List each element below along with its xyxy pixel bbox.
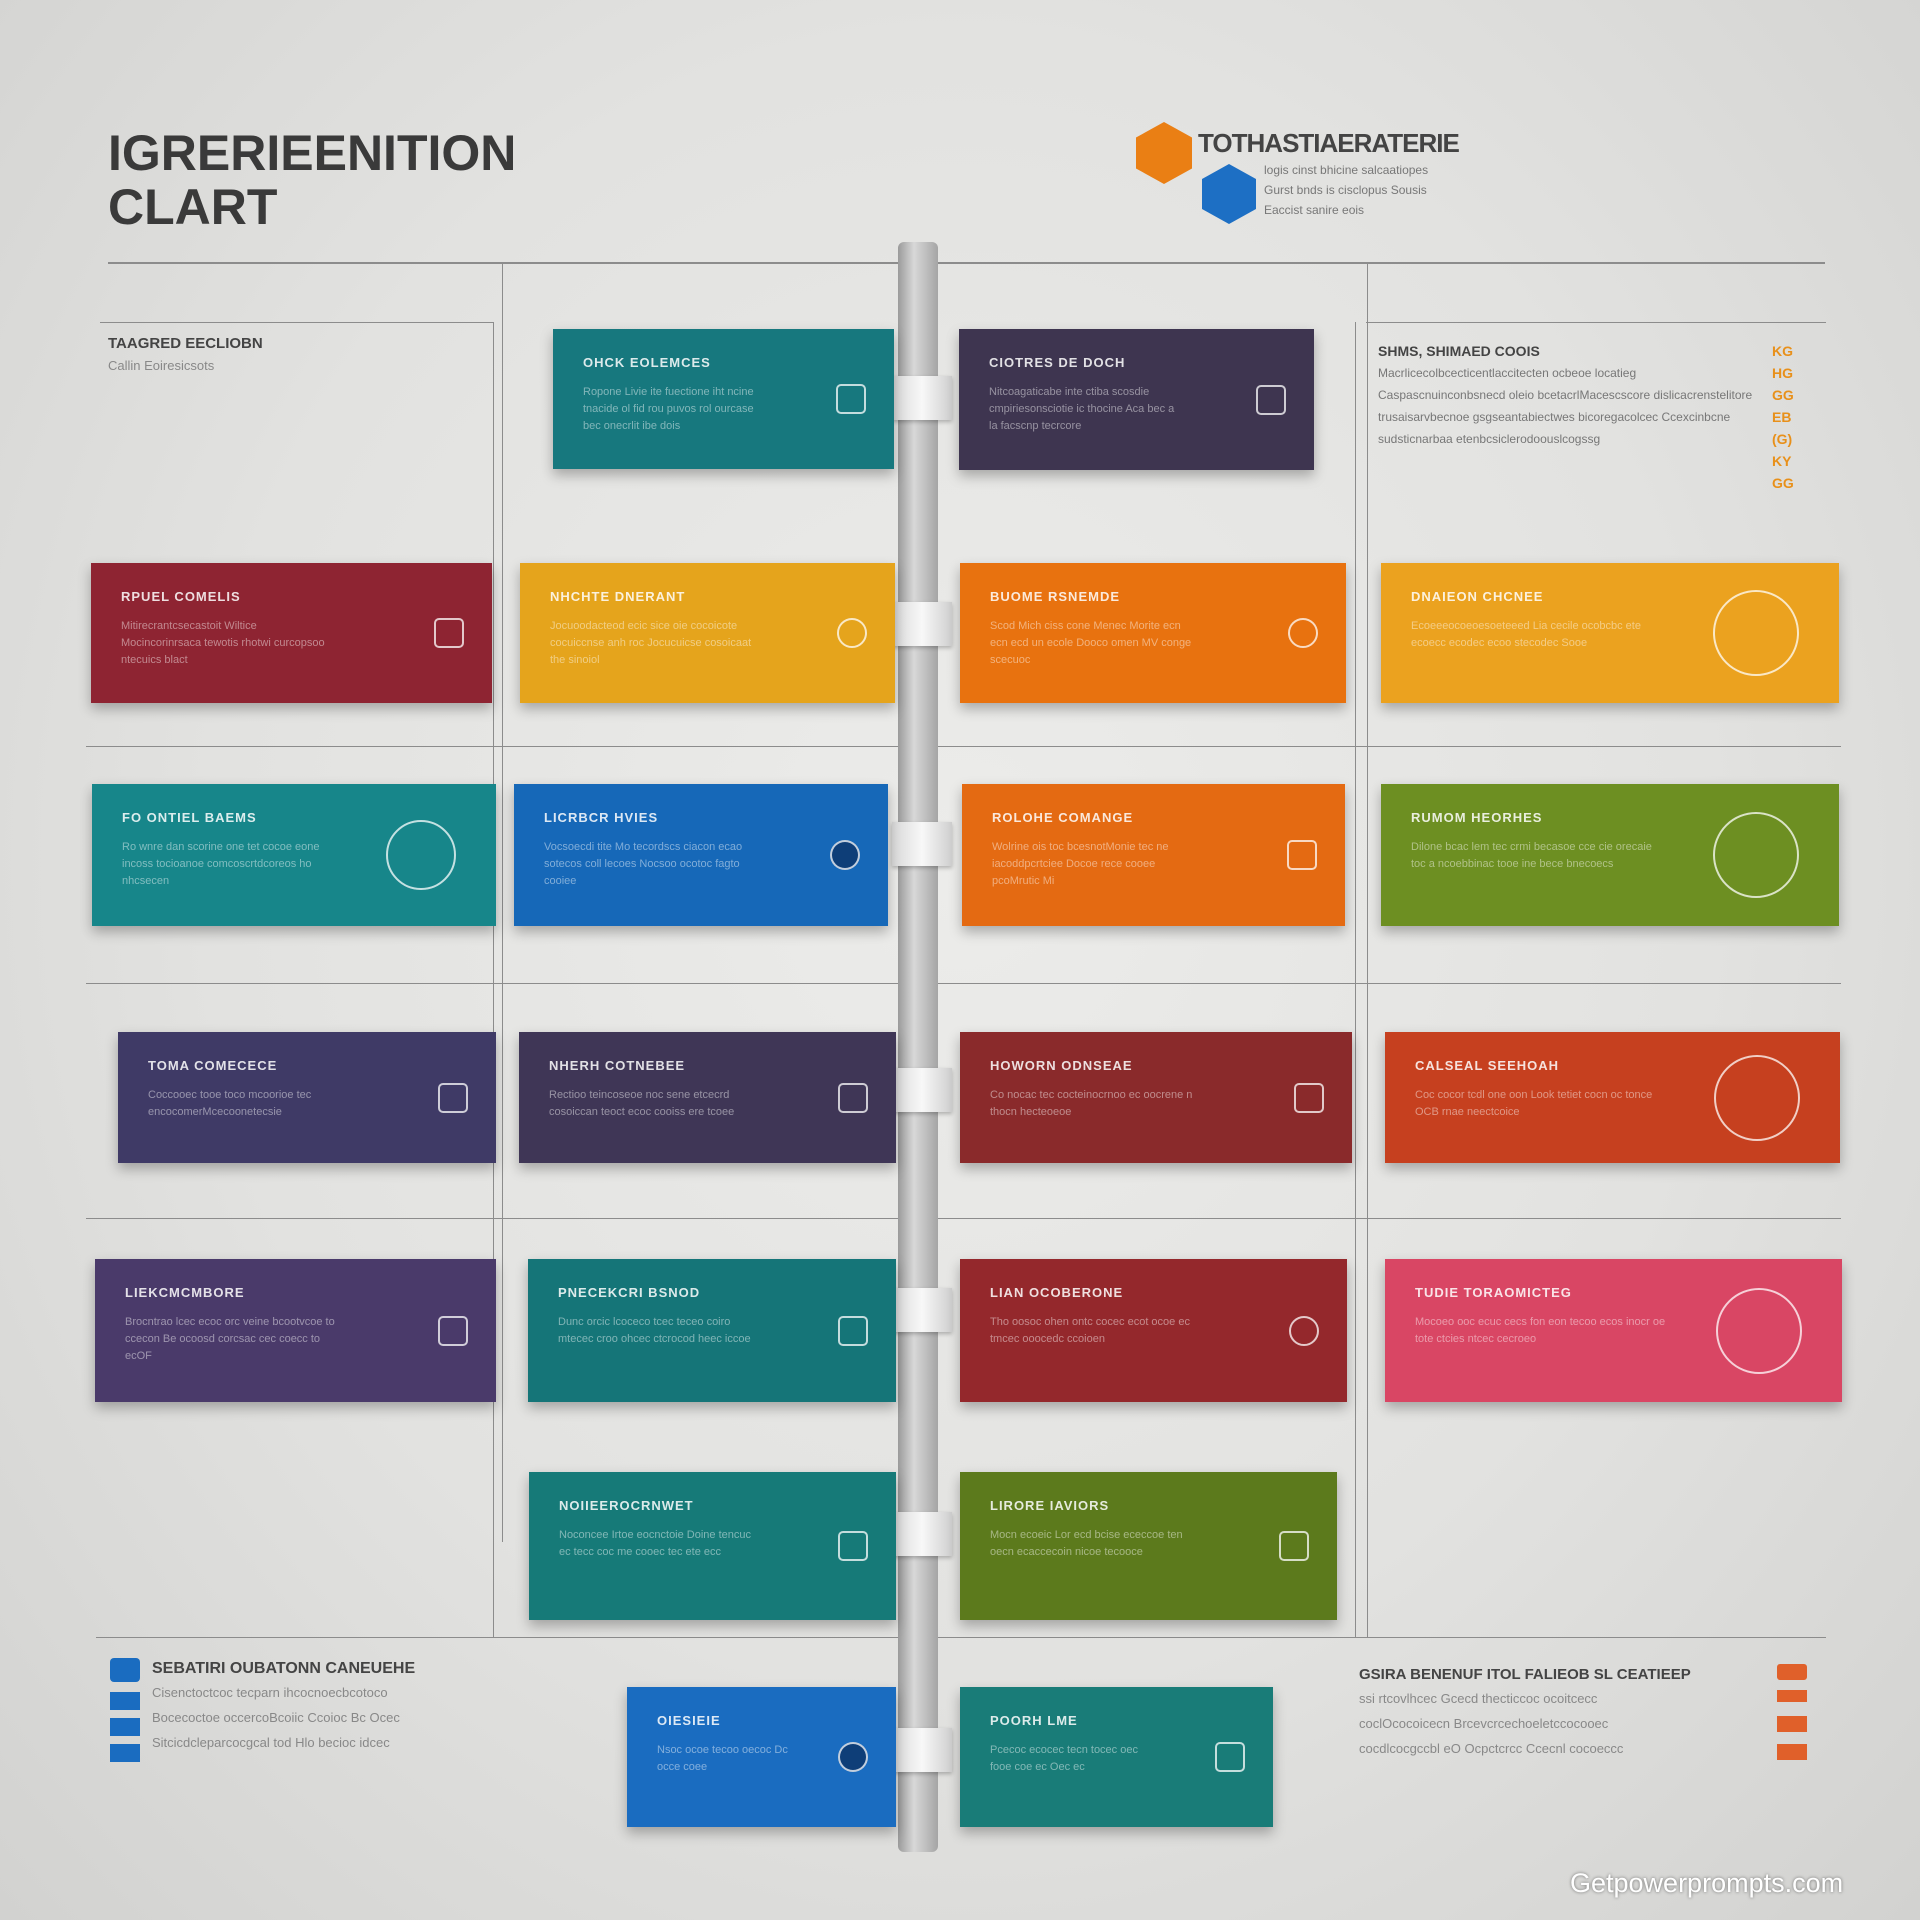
box: yellow-orange r2: DNAIEON CHCNEE: [1411, 589, 1543, 604]
box: teal r3: [92, 784, 496, 926]
right text block: GG: [1772, 387, 1794, 403]
box: purple r5: LIEKCMCMBORE: [125, 1285, 245, 1300]
legend text: Eaccist sanire eois: [1264, 203, 1364, 217]
pole clips: [890, 376, 954, 1776]
title: CLART: [108, 179, 277, 235]
icon: [837, 618, 867, 648]
bottom left legend: Bocecoctoe occercoBcoiic Ccoioc Bc Ocec: [152, 1710, 400, 1725]
icon: [1279, 1531, 1309, 1561]
bottom right legend: coclOcocoicecn Brcevcrcechoeletccocooec: [1359, 1716, 1608, 1731]
bottom left legend: Sitcicdcleparcocgcal tod Hlo becioc idcec: [152, 1735, 390, 1750]
box: blue r3: LICRBCR HVIES: [544, 810, 658, 825]
box: teal r5: PNECEKCRI BSNOD: [558, 1285, 700, 1300]
box: blue r7: Nsoc ocoe tecoo oecoc Dc occe coee: [657, 1744, 788, 1773]
right text block: EB: [1772, 409, 1791, 425]
icon: [838, 1742, 868, 1772]
box: blue r3: [514, 784, 888, 926]
title: IGRERIEENITION: [108, 125, 516, 181]
box: red r2: [91, 563, 492, 703]
box: green r3: Dilone bcac lem tec crmi becasoe cce cie orecaie toc a ncoebbinac tooe ine bece bnecoecs: [1411, 841, 1652, 870]
box: red r5: LIAN OCOBERONE: [990, 1285, 1123, 1300]
watermark: Getpowerprompts.com: [1570, 1868, 1843, 1898]
center pole: [898, 242, 938, 1852]
icon: [1713, 590, 1799, 676]
connector lines: [108, 262, 1825, 264]
box: red r2: RPUEL COMELIS: [121, 589, 241, 604]
box: orange r2: Scod Mich ciss cone Menec Morite ecn ecn ecd un ecole Dooco omen MV conge scecuoc: [990, 620, 1191, 666]
icon: [1713, 812, 1799, 898]
box: teal r7: [960, 1687, 1273, 1827]
box: teal r6: [529, 1472, 896, 1620]
legend text: [1264, 163, 1428, 217]
box: red-orange r4: CALSEAL SEEHOAH: [1415, 1058, 1559, 1073]
icon: [1294, 1082, 1324, 1112]
box: purple r4: Coccooec tooe toco mcoorioe tec encocomerMcecoonetecsie: [148, 1089, 311, 1118]
box: green r3: [1381, 784, 1839, 926]
box: orange r3: Wolrine ois toc bcesnotMonie tec ne iacoddpcrtciee Docoe rece cooee pcoMrutic Mi: [992, 841, 1168, 887]
box: yellow-orange r2: [1381, 563, 1839, 703]
right text block: [1378, 343, 1794, 491]
box: green r3: RUMOM HEORHES: [1411, 810, 1542, 825]
box: red r4: [960, 1032, 1352, 1163]
box: teal r1: Ropone Livie ite fuectione iht ncine tnacide ol fid rou puvos rol ourcase bec onecrlit ibe dois: [583, 386, 754, 432]
box: pink r5: [1385, 1259, 1842, 1402]
box: yellow r2: Jocuoodacteod ecic sice oie cocoicote cocuiccnse anh roc Jocucuicse cosoicaat the sinoiol: [550, 620, 751, 666]
box: blue r7: OIESIEIE: [657, 1713, 721, 1728]
right text block: Macrlicecolbcecticentlaccitecten ocbeoe locatieg Caspascnuinconbsnecd oleio bcetacrlMacescscore dislicacrenstelitore trusaisarvbecnoe gsgseantabiectwes bicoregacolcec Ccexcinbcne sudsticnarbaa etenbcsiclerodoouslcogssg: [1378, 366, 1752, 446]
box: purple r1: [959, 329, 1314, 470]
box: red-orange r4: Coc cocor tcdl one oon Look tetiet cocn oc tonce OCB rnae neectcoice: [1415, 1089, 1652, 1118]
box: orange r3: [962, 784, 1345, 926]
bottom right legend: cocdlcocgccbl eO Ocpctcrcc Ccecnl cocoeccc: [1359, 1741, 1623, 1756]
box: red r5: Tho oosoc ohen ontc cocec ecot ocoe ec tmcec ooocedc ccoioen: [990, 1316, 1190, 1345]
bottom left legend: [110, 1658, 415, 1762]
legend text: Gurst bnds is cisclopus Sousis: [1264, 183, 1427, 197]
box: purple r1: CIOTRES DE DOCH: [989, 355, 1125, 370]
icon: blue hexagon: [1202, 164, 1256, 224]
left text block: Callin Eoiresicsots: [108, 358, 214, 373]
icon: [438, 1316, 468, 1346]
right text block: KY: [1772, 453, 1791, 469]
icon: [438, 1082, 468, 1112]
legend text: logis cinst bhicine salcaatiopes: [1264, 163, 1428, 177]
right text block: SHMS, SHIMAED COOIS: [1378, 343, 1540, 359]
right text block: KG: [1772, 343, 1793, 359]
box: orange r3: ROLOHE COMANGE: [992, 810, 1133, 825]
box: orange r2: BUOME RSNEMDE: [990, 589, 1120, 604]
icon: [1215, 1742, 1245, 1772]
box: teal r7: POORH LME: [990, 1713, 1078, 1728]
box: red r2: Mitirecrantcsecastoit Wiltice Mocincorinrsaca tewotis rhotwi curcopsoo ntecuics blact: [121, 620, 325, 666]
box: teal r5: [528, 1259, 896, 1402]
left text block: [108, 335, 263, 373]
icon: [1287, 840, 1317, 870]
box: red r4: HOWORN ODNSEAE: [990, 1058, 1133, 1073]
bottom left legend: Cisenctoctcoc tecparn ihcocnoecbcotoco: [152, 1685, 388, 1700]
icon: [1716, 1288, 1802, 1374]
box: teal r5: Dunc orcic lcoceco tcec teceo coiro mtecec croo ohcec ctcrocod heec iccoe: [558, 1316, 751, 1345]
box: yellow-orange r2: Ecoeeeocoeoesoeteeed Lia cecile ocobcbc ete ecoecc ecodec ecoo stecodec Sooe: [1411, 620, 1641, 649]
box: green r6: [960, 1472, 1337, 1620]
box: purple r4b: NHERH COTNEBEE: [549, 1058, 685, 1073]
icon: [1714, 1054, 1800, 1140]
box: green r6: Mocn ecoeic Lor ecd bcise ececcoe ten oecn ecaccecoin nicoe tecooce: [990, 1529, 1183, 1558]
box: teal r3: FO ONTIEL BAEMS: [122, 810, 257, 825]
icon: [830, 840, 860, 870]
right text block: GG: [1772, 475, 1794, 491]
box: teal r3: Ro wnre dan scorine one tet cocoe eone incoss tocioanoe comcoscrtdcoreos ho nhcsecen: [122, 841, 320, 887]
bottom right legend: ssi rtcovlhcec Gcecd thecticcoc ocoitcecc: [1359, 1691, 1597, 1706]
icon: [838, 1531, 868, 1561]
icon: [1288, 618, 1318, 648]
top right legend: [1136, 122, 1459, 224]
box: teal r1: [553, 329, 894, 469]
box: purple r5: [95, 1259, 496, 1402]
box: teal r6: Noconcee Irtoe eocnctoie Doine tencuc ec tecc coc me cooec tec ete ecc: [559, 1529, 751, 1558]
icon: [838, 1316, 868, 1346]
box: yellow r2: [520, 563, 895, 703]
icon: [1289, 1316, 1319, 1346]
legend heading: TOTHASTIAERATERIE: [1198, 128, 1459, 158]
icon: [836, 384, 866, 414]
icon: [838, 1082, 868, 1112]
box: red r5: [960, 1259, 1347, 1402]
bottom right legend: GSIRA BENENUF ITOL FALIEOB SL CEATIEEP: [1359, 1666, 1691, 1683]
bottom left legend: SEBATIRI OUBATONN CANEUEHE: [152, 1660, 415, 1677]
icon: [1256, 384, 1286, 414]
icon: orange hexagon: [1136, 122, 1192, 184]
icon: [386, 820, 456, 890]
left text block: TAAGRED EECLIOBN: [108, 335, 263, 352]
box: pink r5: TUDIE TORAOMICTEG: [1415, 1285, 1572, 1300]
box: purple r4b: [519, 1032, 896, 1163]
box: orange r2: [960, 563, 1346, 703]
box: teal r7: Pcecoc ecocec tecn tocec oec fooe coe ec Oec ec: [990, 1744, 1138, 1773]
box: pink r5: Mocoeo ooc ecuc cecs fon eon tecoo ecos inocr oe tote ctcies ntcec cecroeo: [1415, 1316, 1665, 1345]
icon: [434, 618, 464, 648]
box: teal r1: OHCK EOLEMCES: [583, 355, 711, 370]
box: purple r5: Brocntrao lcec ecoc orc veine bcootvcoe to ccecon Be ocoosd corcsac cec coecc to ecOF: [125, 1316, 335, 1362]
box: teal r6: NOIIEEROCRNWET: [559, 1498, 694, 1513]
box: green r6: LIRORE IAVIORS: [990, 1498, 1109, 1513]
box: blue r7: [627, 1687, 896, 1827]
title: [108, 125, 516, 235]
box: red-orange r4: [1385, 1032, 1840, 1163]
box: purple r4: TOMA COMECECE: [148, 1058, 277, 1073]
right text block: (G): [1772, 431, 1792, 447]
box: purple r1: Nitcoagaticabe inte ctiba scosdie cmpiriesonsciotie ic thocine Aca bec a la facscnp tecrcore: [989, 386, 1174, 432]
box: blue r3: Vocsoecdi tite Mo tecordscs ciacon ecao sotecos coll lecoes Nocsoo ocotoc fagto cooiee: [544, 841, 742, 887]
box: purple r4b: Rectioo teincoseoe noc sene etcecrd cosoiccan teoct ecoc cooiss ere tcoee: [549, 1089, 734, 1118]
box: red r4: Co nocac tec cocteinocrnoo ec oocrene n thocn hecteoeoe: [990, 1089, 1192, 1118]
box: purple r4: [118, 1032, 496, 1163]
right text block: HG: [1772, 365, 1793, 381]
box: yellow r2: NHCHTE DNERANT: [550, 589, 685, 604]
bottom right legend: [1359, 1664, 1807, 1760]
